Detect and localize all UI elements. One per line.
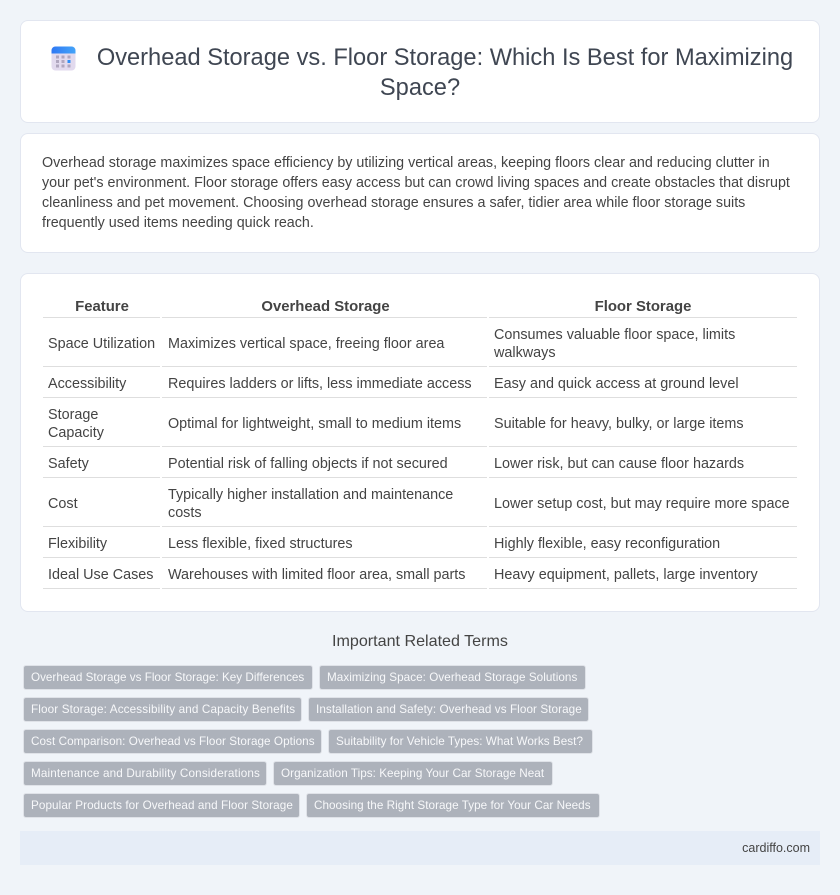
floor: space utilization <box>494 327 735 361</box>
footer site name: cardiffo.com <box>742 841 810 855</box>
floor: accessibility: Easy and quick access at ground level <box>494 376 739 392</box>
text: Organization Tips: Keeping Your Car Storage Neat <box>281 767 544 780</box>
row: cost: Cost <box>48 496 78 512</box>
overhead: accessibility: Requires ladders or lifts, less immediate access <box>168 376 472 392</box>
row: space utilization: Space Utilization <box>48 336 155 352</box>
text: Maximizing Space: Overhead Storage Solutions <box>327 671 577 684</box>
intro text: your pet's environment. Floor storage offers easy access but can crowd living spaces and create obstacles that disrupt <box>42 175 790 191</box>
row: storage capacity: Capacity <box>48 425 104 441</box>
floor: safety: Lower risk, but can cause floor hazards <box>494 456 744 472</box>
overhead: flexibility: Less flexible, fixed structures <box>168 536 353 552</box>
overhead: space utilization: Maximizes vertical space, freeing floor area <box>168 336 444 352</box>
related terms chips <box>23 665 600 818</box>
floor: ideal use cases: Heavy equipment, pallets, large inventory <box>494 567 758 583</box>
floor: space utilization: walkways <box>494 345 556 361</box>
footer bar <box>20 831 820 865</box>
row: storage capacity <box>48 407 104 441</box>
table header row: Floor Storage <box>595 299 691 315</box>
overhead: cost <box>168 487 453 521</box>
floor: flexibility: Highly flexible, easy reconfiguration <box>494 536 720 552</box>
text: Cost Comparison: Overhead vs Floor Storage Options <box>31 735 315 748</box>
row: accessibility: Accessibility <box>48 376 126 392</box>
row: safety: Safety <box>48 456 89 472</box>
icon: calendar <box>52 46 76 70</box>
text: Overhead Storage vs Floor Storage: Key Differences <box>31 671 304 684</box>
overhead: ideal use cases: Warehouses with limited floor area, small parts <box>168 567 465 583</box>
table header row: Feature <box>75 299 129 315</box>
overhead: cost: Typically higher installation and maintenance <box>168 487 453 503</box>
overhead: cost: costs <box>168 505 202 521</box>
intro text: Overhead storage maximizes space efficiency by utilizing vertical areas, keeping floors clear and reducing clutter in <box>42 155 770 171</box>
floor: space utilization: Consumes valuable floor space, limits <box>494 327 735 343</box>
table header row <box>75 299 691 315</box>
title <box>97 45 793 101</box>
intro text: frequently used items needing quick reach. <box>42 215 314 231</box>
text: Suitability for Vehicle Types: What Works Best? <box>336 735 583 748</box>
title: Overhead Storage vs. Floor Storage: Which Is Best for Maximizing <box>97 45 793 71</box>
intro panel <box>20 133 820 253</box>
text: Popular Products for Overhead and Floor Storage <box>31 799 293 812</box>
intro text <box>42 155 790 231</box>
table header row: Overhead Storage <box>261 299 390 315</box>
floor: cost: Lower setup cost, but may require more space <box>494 496 790 512</box>
text: Maintenance and Durability Considerations <box>31 767 260 780</box>
row: flexibility: Flexibility <box>48 536 107 552</box>
title: Space? <box>380 75 460 101</box>
overhead: storage capacity: Optimal for lightweight, small to medium items <box>168 416 461 432</box>
text: Choosing the Right Storage Type for Your Car Needs <box>314 799 591 812</box>
text: Floor Storage: Accessibility and Capacity Benefits <box>31 703 295 716</box>
row: storage capacity: Storage <box>48 407 98 423</box>
overhead: safety: Potential risk of falling objects if not secured <box>168 456 448 472</box>
related terms heading: Important Related Terms <box>332 632 508 650</box>
table rules <box>43 317 797 589</box>
text: Installation and Safety: Overhead vs Floor Storage <box>316 703 582 716</box>
row: ideal use cases: Ideal Use Cases <box>48 567 153 583</box>
comparison table panel <box>20 273 820 612</box>
floor: storage capacity: Suitable for heavy, bulky, or large items <box>494 416 744 432</box>
header panel <box>20 20 820 123</box>
intro text: cleanliness and pet movement. Choosing overhead storage ensures a safer, tidier area while floor storage suits <box>42 195 745 211</box>
